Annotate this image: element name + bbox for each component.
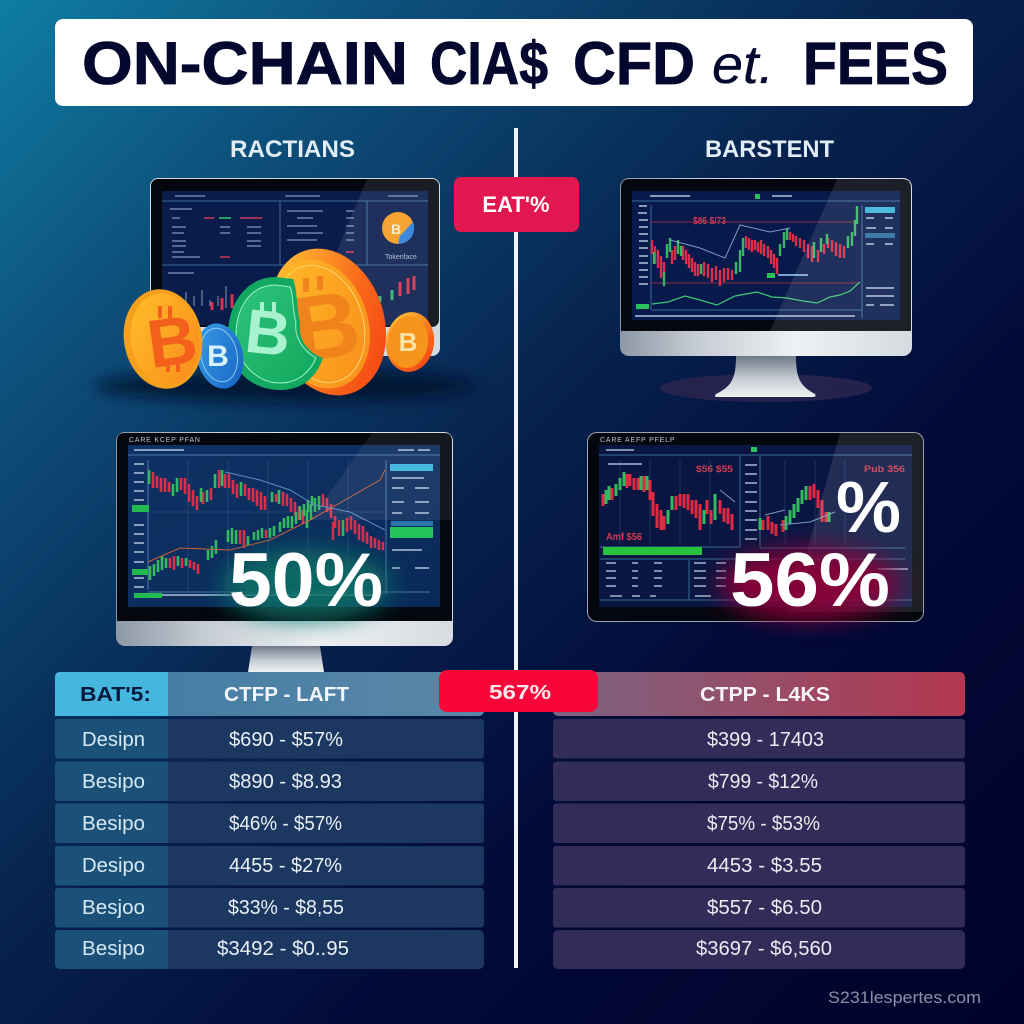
badge: table	[439, 670, 598, 712]
bezel caption: CARE KCEP PFAN	[129, 437, 201, 444]
row 5	[55, 888, 484, 928]
title banner: FEES	[803, 30, 948, 97]
row 3	[553, 804, 965, 843]
glow behind 50%	[221, 549, 391, 621]
row 5: $33% - $8,55	[228, 897, 344, 919]
table header left: BAT'5:	[80, 684, 151, 706]
big value: 50%: 50%	[229, 538, 383, 623]
table: right column	[553, 672, 965, 969]
row 1	[55, 719, 484, 758]
row 4: 4453 - $3.55	[707, 855, 822, 877]
pie icon: B	[391, 221, 401, 237]
row 5	[553, 888, 965, 928]
row 1: Desipn	[82, 729, 145, 751]
title banner: et.	[712, 35, 774, 95]
monitor: top left with coins	[150, 178, 440, 356]
monitor: lower left with 50%	[116, 432, 453, 672]
coin: blue	[191, 319, 249, 393]
coin: green	[228, 277, 323, 390]
row 3: $75% - $53%	[707, 813, 820, 835]
row 3: $46% - $57%	[229, 813, 342, 835]
coin: orange left: B	[143, 301, 202, 383]
row 6: Besipo	[82, 938, 145, 960]
monitor: top right	[620, 178, 912, 402]
row 3: Besipo	[82, 813, 145, 835]
row 4	[553, 846, 965, 886]
row 2	[55, 762, 484, 801]
coin: blue: B	[207, 340, 229, 373]
big percent sign: %	[836, 468, 901, 548]
stand shadow	[660, 374, 872, 402]
stand	[248, 646, 324, 672]
row 6: $3492 - $0..95	[217, 938, 349, 960]
badge: table: 567%	[489, 682, 551, 704]
badge: top	[454, 177, 579, 232]
coin: orange left	[116, 283, 210, 395]
row 2: $799 - $12%	[708, 771, 818, 793]
footer credit: S231lespertes.com	[828, 988, 981, 1007]
row 6	[553, 930, 965, 969]
screen: candlestick chart	[632, 191, 900, 320]
pie icon	[382, 212, 414, 244]
row 5: Besjoo	[82, 897, 145, 919]
screen: candlestick chart: $86 $/73	[693, 216, 726, 227]
row 1: $690 - $57%	[229, 729, 343, 751]
coin: large orange	[252, 233, 404, 411]
row 6: $3697 - $6,560	[696, 938, 832, 960]
screen: portfolio dashboard: Tokenface	[385, 254, 417, 261]
screen: split candlestick charts	[599, 445, 912, 607]
stand	[715, 356, 816, 397]
row 2: $890 - $8.93	[229, 771, 342, 793]
coin: small orange right: B	[399, 327, 417, 357]
row 1: $399 - 17403	[707, 729, 824, 751]
table: left column	[55, 672, 484, 969]
row 5: $557 - $6.50	[707, 897, 822, 919]
table header left	[55, 672, 484, 716]
row 2	[553, 762, 965, 801]
row 4	[55, 846, 484, 886]
heading: left column: RACTIANS	[230, 136, 355, 163]
row 1	[553, 719, 965, 758]
heading: right column: BARSTENT	[705, 136, 834, 163]
row 3	[55, 804, 484, 843]
coin: green: B	[242, 297, 294, 370]
table header right: CTPP - L4KS	[700, 684, 830, 706]
centre divider	[514, 128, 518, 968]
coin: large orange: B	[286, 272, 366, 382]
row 4: 4455 - $27%	[229, 855, 342, 877]
table header right	[553, 672, 965, 716]
screen: portfolio dashboard	[162, 191, 428, 325]
title banner: CIA$	[430, 30, 548, 97]
coin: small orange right	[382, 309, 438, 375]
badge: top: EAT'%	[482, 192, 550, 217]
monitor: lower right with 56%	[587, 432, 924, 623]
big value: 56%: 56%	[730, 538, 890, 623]
bezel caption: CARE AEFP PFELP	[600, 437, 675, 444]
title banner: ON-CHAIN	[82, 30, 408, 97]
row 4: Desipo	[82, 855, 145, 877]
table header left: CTFP - LAFT	[224, 684, 349, 706]
row 2: Besipo	[82, 771, 145, 793]
screen: split candlestick charts: $56 $55	[696, 464, 733, 474]
screen: split candlestick charts: Amf $56	[606, 532, 642, 543]
glow behind 56%	[720, 548, 900, 620]
title banner	[55, 19, 973, 106]
screen: candlestick chart	[128, 445, 440, 607]
row 6	[55, 930, 484, 969]
mini candles	[186, 276, 414, 310]
screen: split candlestick charts: Pub 356	[864, 464, 905, 474]
title banner: CFD	[573, 30, 695, 97]
coin shadow	[95, 370, 475, 402]
